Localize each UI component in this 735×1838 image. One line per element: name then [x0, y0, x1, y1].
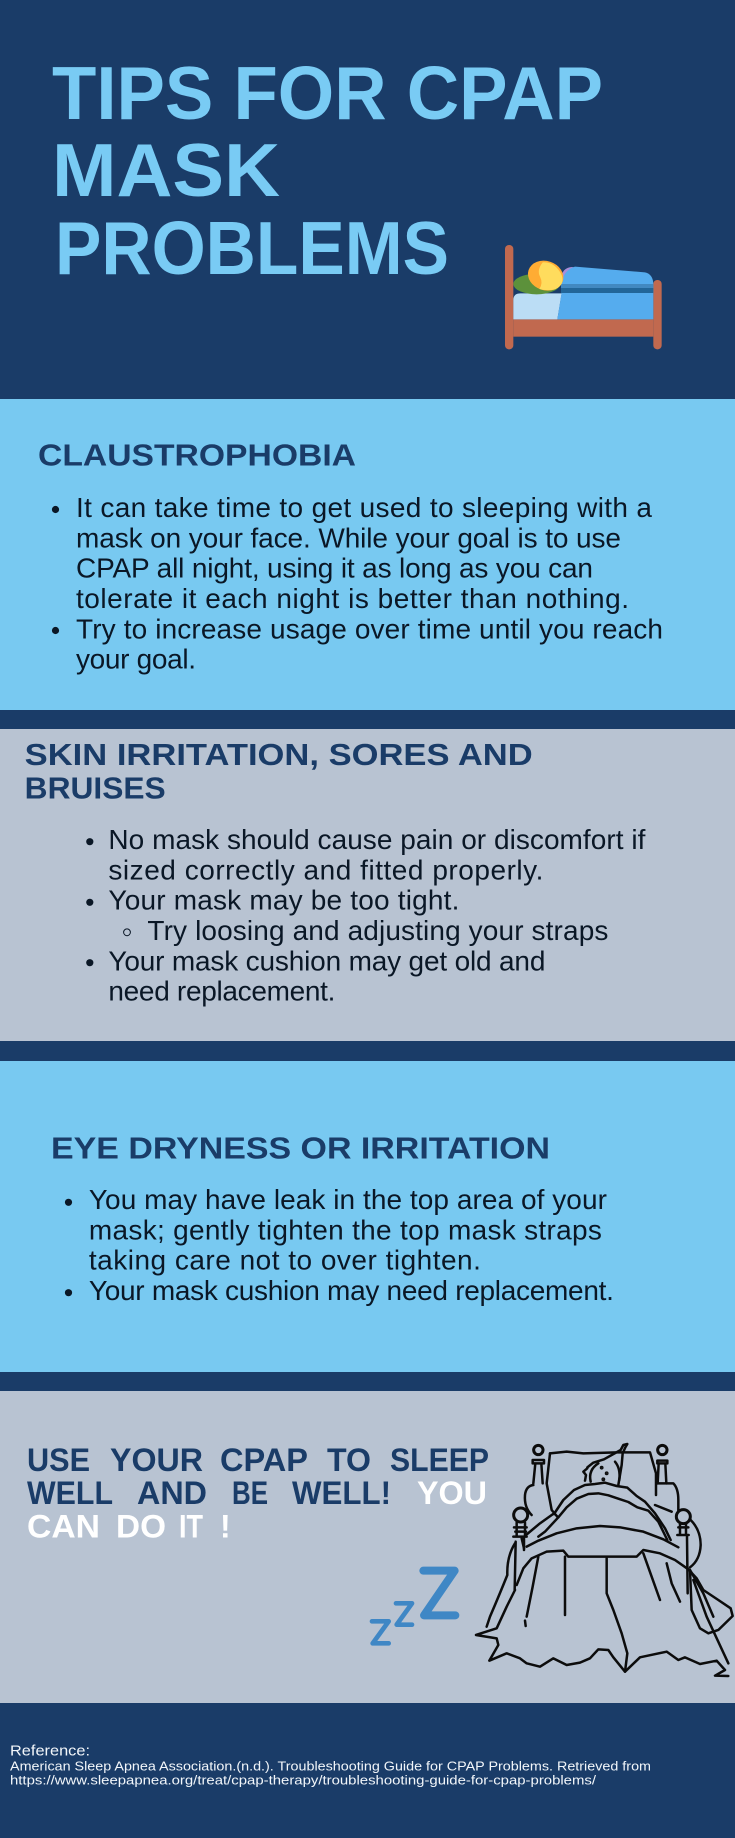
icon: person in bed: [505, 245, 662, 349]
closing message text: SLEEP: [390, 1442, 489, 1478]
panel: skin irritation: [0, 729, 735, 1041]
bullet list: claustrophobia: It can take time to get used to sleeping with a: [76, 492, 652, 523]
title: MASK: [52, 128, 280, 212]
closing message text: BE: [232, 1475, 268, 1511]
footer: reference: [10, 1743, 651, 1788]
panel: eye dryness: [0, 1061, 735, 1372]
bullet list: skin irritation: Try loosing and adjusting your straps: [147, 915, 608, 946]
closing message text: TO: [327, 1442, 371, 1478]
bullet list: eye dryness: taking care not to over tighten.: [89, 1245, 481, 1276]
closing message text: DO: [116, 1508, 166, 1544]
bullet list: claustrophobia: [52, 492, 663, 674]
closing message text: CAN: [27, 1508, 100, 1544]
title: TIPS FOR CPAP: [52, 51, 603, 135]
heading: claustrophobia: CLAUSTROPHOBIA: [38, 438, 356, 473]
closing message text: WELL!: [292, 1475, 391, 1511]
title: [52, 51, 603, 290]
heading: skin irritation, sores and bruises: BRUISES: [25, 770, 166, 805]
icon: sleeping zzz: [372, 1571, 455, 1643]
heading: skin irritation, sores and bruises: [25, 737, 533, 805]
bullet list: claustrophobia: tolerate it each night is better than nothing.: [76, 583, 629, 614]
closing message text: USE: [27, 1442, 90, 1478]
bullet list: eye dryness: mask; gently tighten the top mask straps: [89, 1214, 602, 1245]
bullet list: skin irritation: No mask should cause pain or discomfort if: [108, 824, 646, 855]
bullet list: claustrophobia: mask on your face. While your goal is to use: [76, 522, 621, 553]
footer: reference: Reference:: [10, 1743, 90, 1760]
panel: claustrophobia: [0, 399, 735, 710]
panel: closing message: [0, 1391, 735, 1703]
bullet list: claustrophobia: Try to increase usage over time until you reach: [76, 613, 663, 644]
bullet list: skin irritation: [86, 824, 646, 1007]
bullet list: eye dryness: [65, 1184, 614, 1306]
closing message text: CPAP: [220, 1442, 308, 1478]
footer: reference: https://www.sleepapnea.org/treat/cpap-therapy/troubleshooting-guide-for-cpap-problems/: [10, 1772, 596, 1788]
bullet list: claustrophobia: CPAP all night, using it as long as you can: [76, 553, 593, 584]
closing message text: YOUR: [110, 1442, 203, 1478]
bullet list: eye dryness: Your mask cushion may need replacement.: [89, 1275, 614, 1306]
illustration: person sleeping in bed: [476, 1444, 733, 1676]
bullet list: skin irritation: Your mask may be too tight.: [108, 885, 459, 916]
closing message text: !: [220, 1508, 231, 1544]
title: PROBLEMS: [55, 206, 449, 290]
bullet list: skin irritation: need replacement.: [108, 976, 335, 1007]
bullet list: claustrophobia: your goal.: [76, 643, 196, 674]
closing message text: YOU: [417, 1475, 487, 1511]
heading: eye dryness or irritation: EYE DRYNESS OR IRRITATION: [51, 1130, 550, 1165]
closing message text: WELL: [27, 1475, 113, 1511]
bullet list: skin irritation: sized correctly and fitted properly.: [108, 854, 543, 885]
closing message text: IT: [179, 1508, 203, 1544]
footer: reference: American Sleep Apnea Association.(n.d.). Troubleshooting Guide for CPAP Problems. Retrieved from: [10, 1758, 651, 1774]
closing message text: [27, 1442, 489, 1544]
panel: title header: [52, 51, 662, 349]
heading: skin irritation, sores and bruises: SKIN IRRITATION, SORES AND: [25, 737, 533, 772]
bullet list: eye dryness: You may have leak in the top area of your: [89, 1184, 607, 1215]
bullet list: skin irritation: Your mask cushion may get old and: [108, 945, 545, 976]
closing message text: AND: [137, 1475, 207, 1511]
